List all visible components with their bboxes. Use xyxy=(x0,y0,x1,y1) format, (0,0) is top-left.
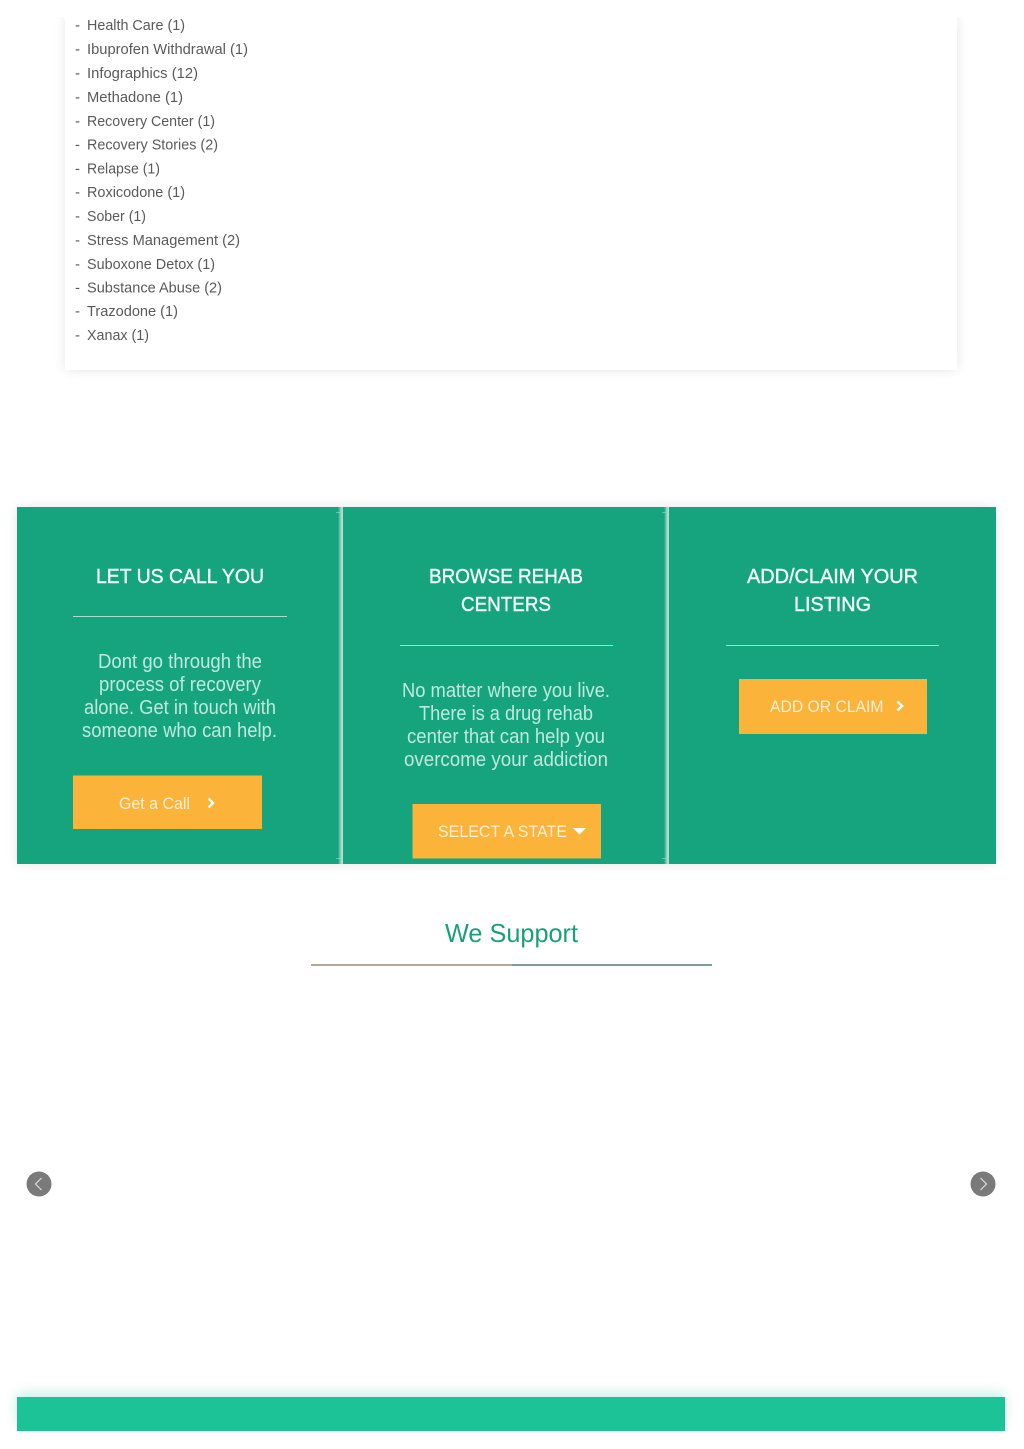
category: Health Care: - xyxy=(75,17,80,34)
category: Recovery Stories: Recovery Stories (2) xyxy=(87,136,218,154)
category: Methadone: - xyxy=(75,89,80,106)
category: Suboxone Detox: - xyxy=(75,256,80,273)
category: Recovery Stories: - xyxy=(75,136,80,154)
category: Stress Management: Stress Management (2) xyxy=(87,232,240,249)
category: Sober: Sober (1) xyxy=(87,208,146,225)
card: browse rehab centers xyxy=(400,565,613,858)
category: Infographics: - xyxy=(75,65,80,82)
panel: call to action band xyxy=(17,507,996,864)
category: Sober: - xyxy=(75,208,80,225)
heading: we support: We Support xyxy=(445,918,579,948)
text: browse rehab description: There is a drug rehab xyxy=(419,703,593,725)
text: browse rehab description: No matter where you live. xyxy=(402,680,610,702)
footer band xyxy=(17,1393,1005,1431)
heading: let us call you: LET US CALL YOU xyxy=(96,565,264,588)
card: add or claim listing xyxy=(726,565,939,734)
category: Roxicodone: Roxicodone (1) xyxy=(87,184,185,201)
button: get a call: Get a Call xyxy=(119,795,190,813)
category: Trazodone: Trazodone (1) xyxy=(87,303,178,320)
button: get a call xyxy=(73,776,262,829)
heading underline xyxy=(311,964,712,966)
text: browse rehab description xyxy=(402,680,610,771)
card: let us call you xyxy=(73,565,287,829)
panel: categories list xyxy=(0,0,1024,370)
text: let us call you description xyxy=(82,651,277,742)
heading: add or claim your listing: LISTING xyxy=(794,593,871,616)
heading: add or claim your listing xyxy=(747,565,918,616)
category: Ibuprofen Withdrawal: - xyxy=(75,41,80,58)
text: let us call you description: someone who can help. xyxy=(82,720,277,742)
heading: browse rehab centers: CENTERS xyxy=(461,593,551,616)
button: add or claim: ADD OR CLAIM xyxy=(770,698,884,716)
category: Recovery Center: - xyxy=(75,113,80,130)
text: browse rehab description: center that can help you xyxy=(407,726,605,748)
category: Recovery Center: Recovery Center (1) xyxy=(87,113,215,130)
category: Stress Management: - xyxy=(75,232,80,249)
heading: browse rehab centers: BROWSE REHAB xyxy=(429,565,583,588)
icon: carousel next arrow xyxy=(970,1172,996,1196)
button: add or claim xyxy=(739,679,927,734)
text: browse rehab description: overcome your addiction xyxy=(404,749,608,771)
category: Ibuprofen Withdrawal: Ibuprofen Withdrawal (1) xyxy=(87,41,248,58)
category: Relapse: Relapse (1) xyxy=(87,160,160,178)
text: let us call you description: Dont go through the xyxy=(98,651,262,673)
category: Substance Abuse: Substance Abuse (2) xyxy=(87,280,222,296)
category: Methadone: Methadone (1) xyxy=(87,89,183,106)
category: Substance Abuse: - xyxy=(75,280,80,296)
heading: browse rehab centers xyxy=(429,565,583,616)
category: Xanax: Xanax (1) xyxy=(87,327,149,344)
category: Suboxone Detox: Suboxone Detox (1) xyxy=(87,256,215,273)
category: Xanax: - xyxy=(75,327,80,344)
category: Trazodone: - xyxy=(75,303,80,320)
button: select a state xyxy=(412,804,601,858)
button: select a state: SELECT A STATE xyxy=(438,823,567,841)
category: Roxicodone: - xyxy=(75,184,80,201)
category: Infographics: Infographics (12) xyxy=(87,65,198,82)
text: let us call you description: process of recovery xyxy=(99,674,261,696)
text: let us call you description: alone. Get in touch with xyxy=(84,697,276,719)
category: Health Care: Health Care (1) xyxy=(87,17,185,34)
heading: add or claim your listing: ADD/CLAIM YOUR xyxy=(747,565,918,588)
icon: carousel previous arrow xyxy=(26,1172,52,1196)
category: Relapse: - xyxy=(75,160,80,178)
